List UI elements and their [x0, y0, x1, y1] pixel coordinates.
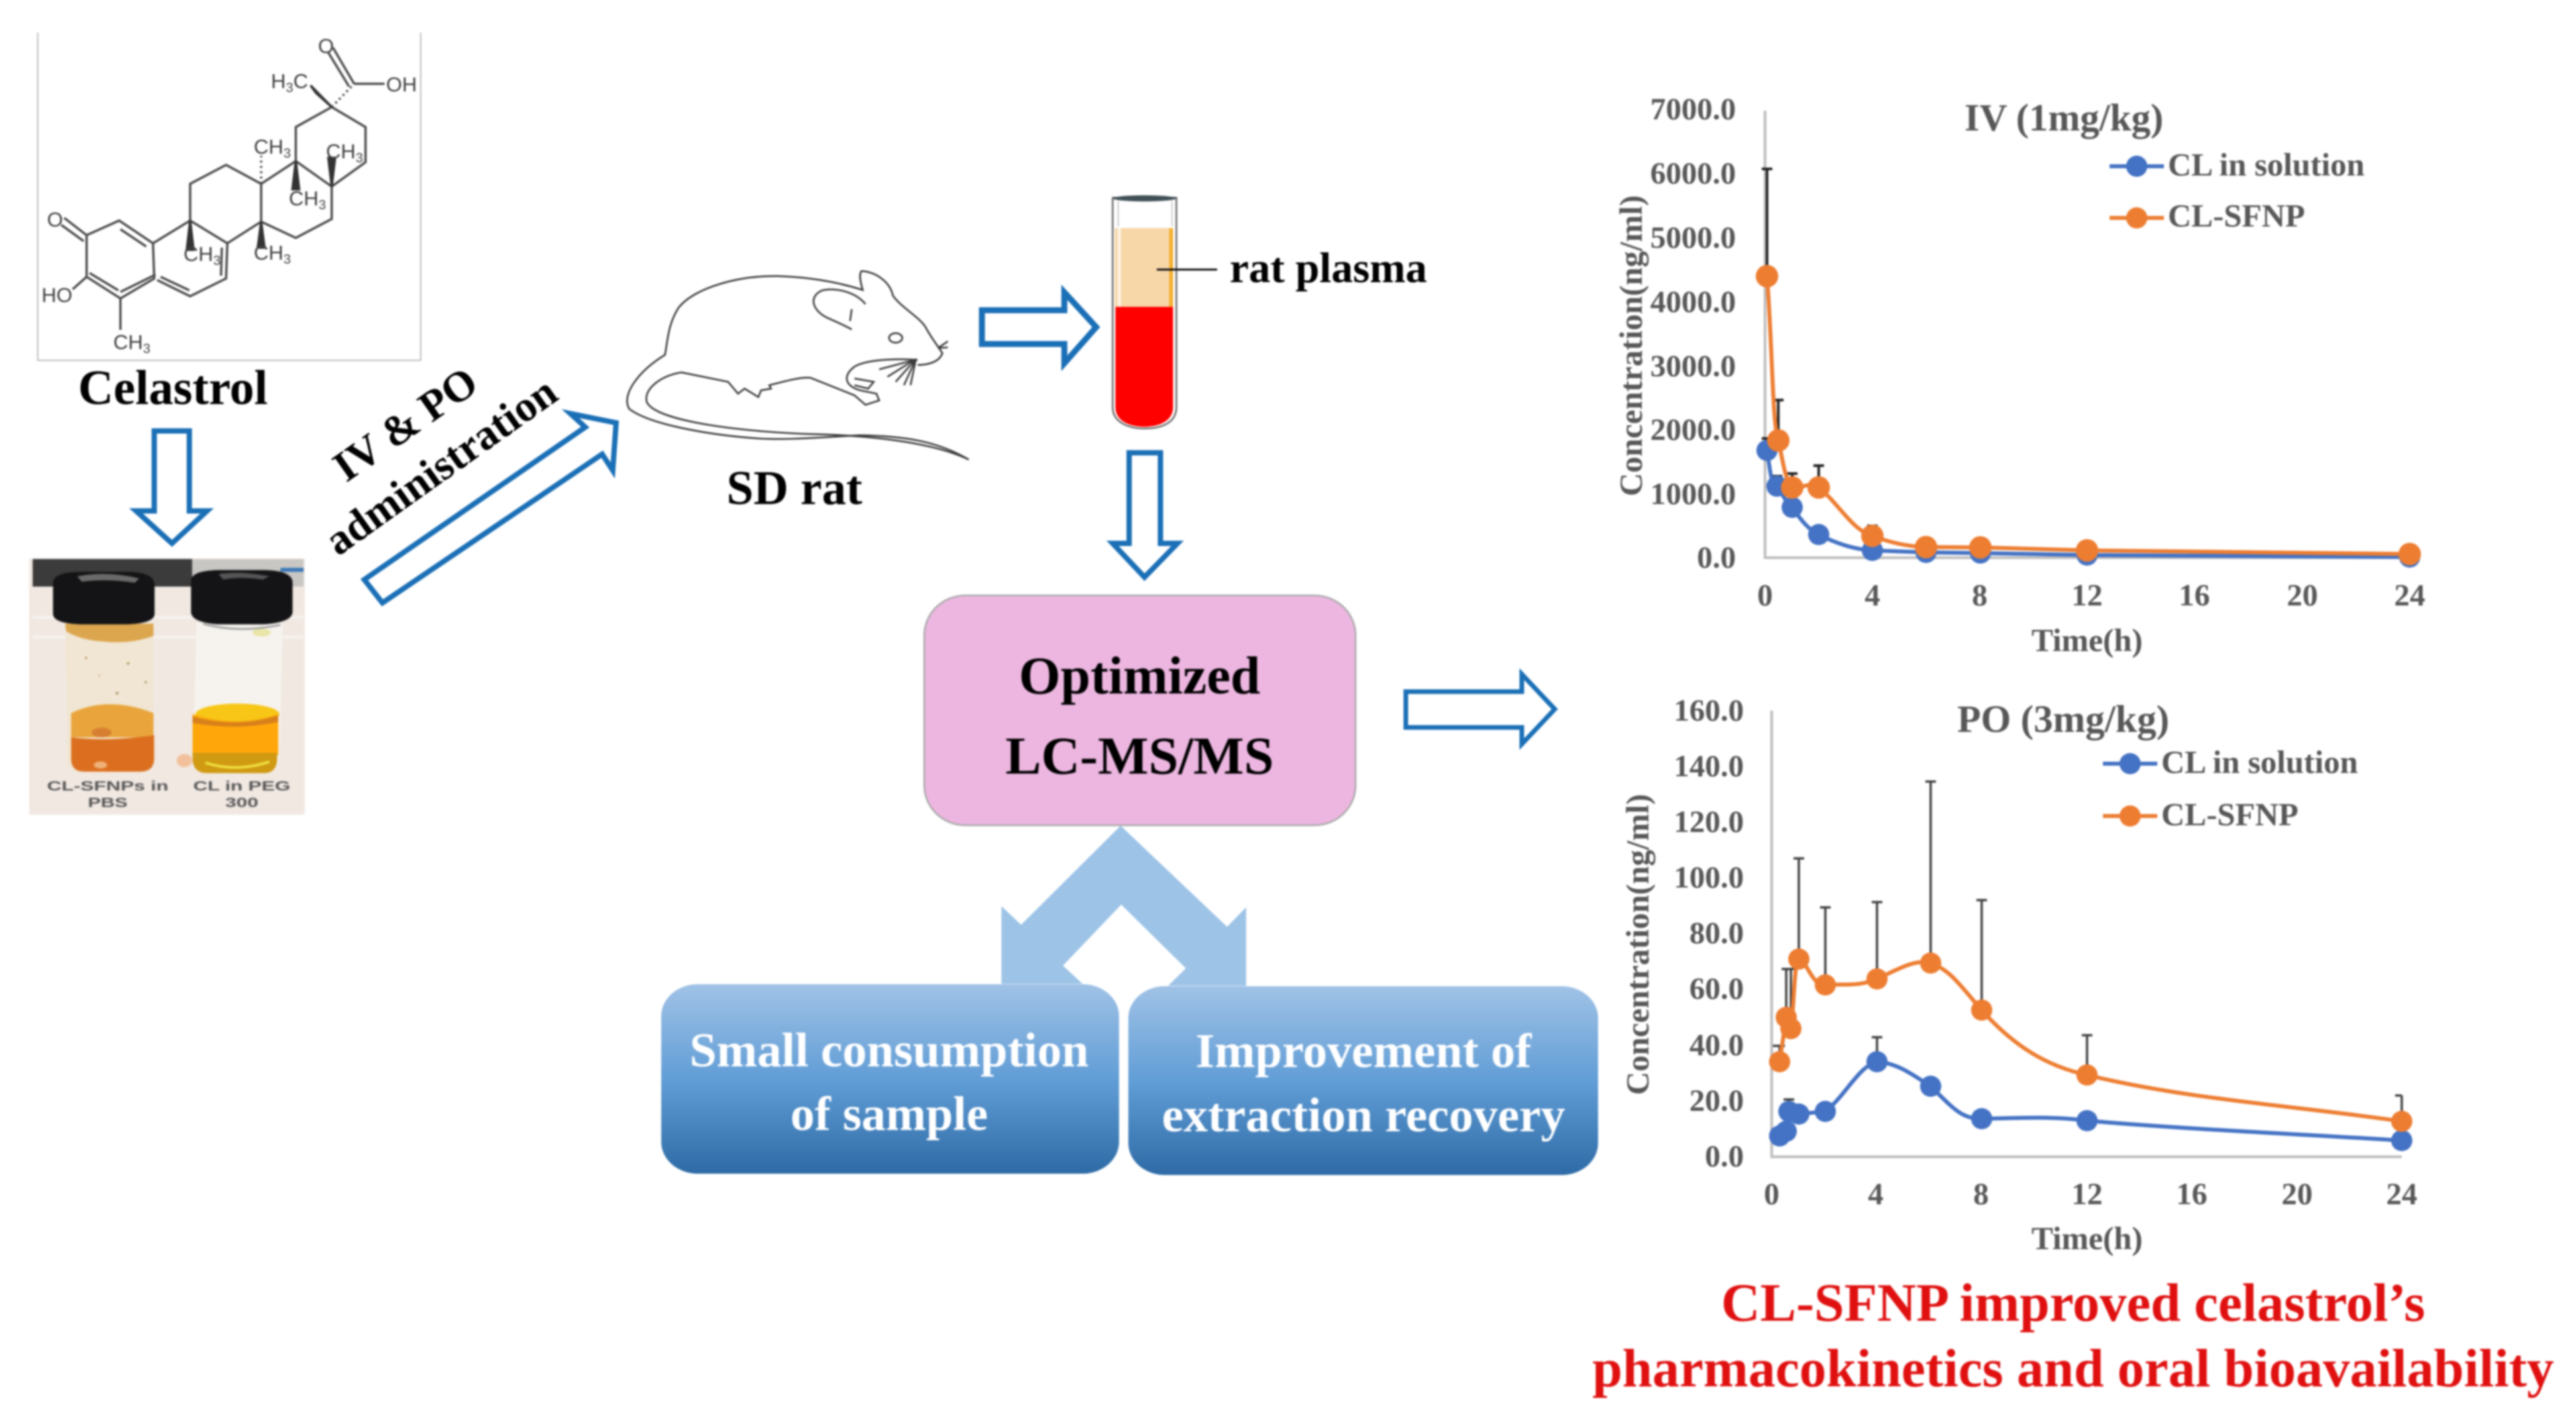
- y axis tick labels PO: 0.0: [1705, 1139, 1744, 1174]
- legend PO: CL-SFNP: [2161, 796, 2298, 833]
- conclusion text: CL-SFNP improved celastrol’s: [1721, 1272, 2425, 1333]
- error bars: [1762, 169, 1878, 536]
- x axis tick labels PO: 0: [1764, 1177, 1780, 1211]
- panel: celastrol chemical structure: H: [271, 70, 286, 93]
- label: IV and PO administration: IV & PO: [325, 358, 486, 491]
- vial: CL in PEG 300: [177, 570, 293, 773]
- icon: blood collection tube: [1112, 195, 1177, 429]
- panel: celastrol chemical structure: CH: [184, 242, 213, 266]
- panel: celastrol chemical structure: OH: [386, 73, 417, 96]
- panel: improvement of extraction recovery: extraction recovery: [1162, 1088, 1566, 1142]
- chart: PO concentration vs time: PO (3mg/kg): [1957, 697, 2169, 740]
- label: SD rat: SD rat: [727, 461, 862, 515]
- x axis tick labels: 12: [2071, 578, 2103, 613]
- arrow: diagonal to rat: [364, 413, 616, 603]
- panel: celastrol chemical structure: C: [294, 70, 308, 93]
- chart: IV concentration vs time: [1613, 92, 2425, 658]
- y axis tick labels: 3000.0: [1650, 349, 1736, 383]
- x axis tick labels: 0: [1757, 578, 1773, 613]
- x axis tick labels PO: 12: [2071, 1177, 2103, 1211]
- y axis tick labels PO: 60.0: [1690, 972, 1744, 1006]
- legend: CL-SFNP: [2168, 197, 2305, 234]
- panel: improvement of extraction recovery: Improvement of: [1196, 1024, 1532, 1078]
- x axis tick labels: 16: [2178, 578, 2210, 613]
- panel: celastrol chemical structure: CH: [326, 140, 356, 163]
- x axis tick labels PO: 8: [1973, 1177, 1989, 1211]
- panel: celastrol chemical structure: HO: [42, 283, 72, 307]
- legend PO: [2103, 744, 2358, 833]
- legend PO: CL in solution: [2161, 744, 2358, 780]
- y axis tick labels: 4000.0: [1650, 285, 1736, 319]
- series: CL in solution: [1756, 440, 2420, 568]
- panel: celastrol chemical structure: 3: [286, 81, 294, 95]
- panel: celastrol chemical structure: 3: [356, 151, 363, 166]
- y axis tick labels PO: 120.0: [1674, 805, 1744, 839]
- x axis tick labels: 4: [1864, 578, 1880, 613]
- chart: PO concentration vs time: Time(h): [2031, 1220, 2143, 1256]
- photo: two vials with captions: PBS: [88, 795, 128, 810]
- arrow: LC-MS/MS double arrow to benefits: [1002, 826, 1246, 986]
- label: IV and PO administration: administration: [316, 368, 566, 565]
- x axis tick labels PO: 24: [2387, 1177, 2417, 1211]
- panel: celastrol chemical structure: 3: [319, 198, 326, 213]
- arrow: rat to tube: [982, 292, 1096, 363]
- x axis tick labels: 24: [2394, 578, 2425, 613]
- x axis tick labels PO: [1764, 1177, 2417, 1211]
- panel: small consumption of sample: [661, 984, 1119, 1174]
- chart: IV concentration vs time: Concentration(ng/ml): [1613, 195, 1649, 496]
- panel: celastrol chemical structure: CH: [113, 331, 143, 354]
- conclusion text: pharmacokinetics and oral bioavailability: [1592, 1338, 2554, 1398]
- chart: PO concentration vs time: Concentration(ng/ml): [1619, 794, 1656, 1095]
- y axis tick labels PO: 40.0: [1690, 1028, 1744, 1062]
- y axis tick labels PO: 140.0: [1674, 749, 1744, 784]
- photo: two vials with captions: CL in PEG: [193, 778, 290, 793]
- y axis tick labels PO: 20.0: [1690, 1084, 1744, 1118]
- x axis tick labels PO: 4: [1868, 1177, 1884, 1211]
- icon: rat line drawing: [627, 271, 969, 460]
- series: CL-SFNP: [1756, 265, 2421, 566]
- panel: Optimized LC-MS/MS: Optimized: [1019, 646, 1260, 705]
- photo: two vials with captions: 300: [225, 795, 258, 810]
- panel: celastrol chemical structure: CH: [254, 241, 284, 264]
- heading: Celastrol: Celastrol: [78, 361, 268, 415]
- y axis tick labels PO: 80.0: [1690, 916, 1744, 950]
- panel: improvement of extraction recovery: [1128, 986, 1598, 1175]
- panel: small consumption of sample: Small consumption: [690, 1023, 1089, 1077]
- panel: Optimized LC-MS/MS: [924, 595, 1356, 825]
- callout: rat plasma label: rat plasma: [1230, 244, 1427, 292]
- legend: [2110, 146, 2365, 234]
- panel: celastrol chemical structure: 3: [284, 252, 291, 267]
- panel: celastrol chemical structure: O: [47, 208, 63, 231]
- y axis tick labels: 2000.0: [1650, 413, 1736, 447]
- photo: two vials with captions: CL-SFNPs in: [47, 778, 168, 793]
- panel: Optimized LC-MS/MS: LC-MS/MS: [1006, 726, 1273, 786]
- y axis tick labels PO: 160.0: [1674, 693, 1744, 728]
- y axis tick labels: 0.0: [1697, 540, 1736, 575]
- y axis tick labels PO: 100.0: [1674, 860, 1744, 895]
- x axis tick labels: [1757, 578, 2425, 613]
- series: CL in solution PO: [1769, 1051, 2412, 1151]
- x axis tick labels PO: 20: [2282, 1177, 2312, 1211]
- arrow: tube to LC-MS/MS: [1112, 453, 1177, 577]
- photo: two vials with captions: [29, 558, 305, 815]
- conclusion text: [1592, 1272, 2554, 1398]
- chart: IV concentration vs time: IV (1mg/kg): [1964, 96, 2163, 139]
- vial: CL-SFNPs in PBS: [53, 572, 154, 773]
- y axis tick labels: 7000.0: [1650, 92, 1736, 127]
- x axis tick labels: 20: [2287, 578, 2318, 613]
- x axis tick labels PO: 16: [2176, 1177, 2208, 1211]
- panel: celastrol chemical structure: CH: [254, 135, 284, 158]
- panel: celastrol chemical structure: 3: [213, 254, 221, 268]
- y axis tick labels: 5000.0: [1650, 221, 1736, 255]
- error bars PO: [1773, 782, 2402, 1121]
- arrow: celastrol to vials: [136, 431, 207, 543]
- chart: IV concentration vs time: Time(h): [2031, 622, 2143, 658]
- chart: PO concentration vs time: [1619, 693, 2417, 1256]
- y axis tick labels PO: [1674, 693, 1744, 1174]
- x axis tick labels: 8: [1972, 578, 1988, 613]
- y axis tick labels: 6000.0: [1650, 156, 1736, 191]
- y axis tick labels: 1000.0: [1650, 477, 1736, 511]
- arrow: LC-MS/MS to charts: [1406, 674, 1555, 744]
- y axis tick labels: [1650, 92, 1736, 575]
- panel: celastrol chemical structure: 3: [143, 342, 150, 356]
- series: CL-SFNP PO: [1769, 948, 2412, 1132]
- panel: celastrol chemical structure: [38, 32, 421, 360]
- panel: celastrol chemical structure: O: [318, 34, 334, 58]
- panel: celastrol chemical structure: CH: [289, 187, 319, 210]
- panel: small consumption of sample: of sample: [790, 1087, 988, 1141]
- panel: celastrol chemical structure: 3: [284, 146, 291, 161]
- legend: CL in solution: [2168, 146, 2365, 183]
